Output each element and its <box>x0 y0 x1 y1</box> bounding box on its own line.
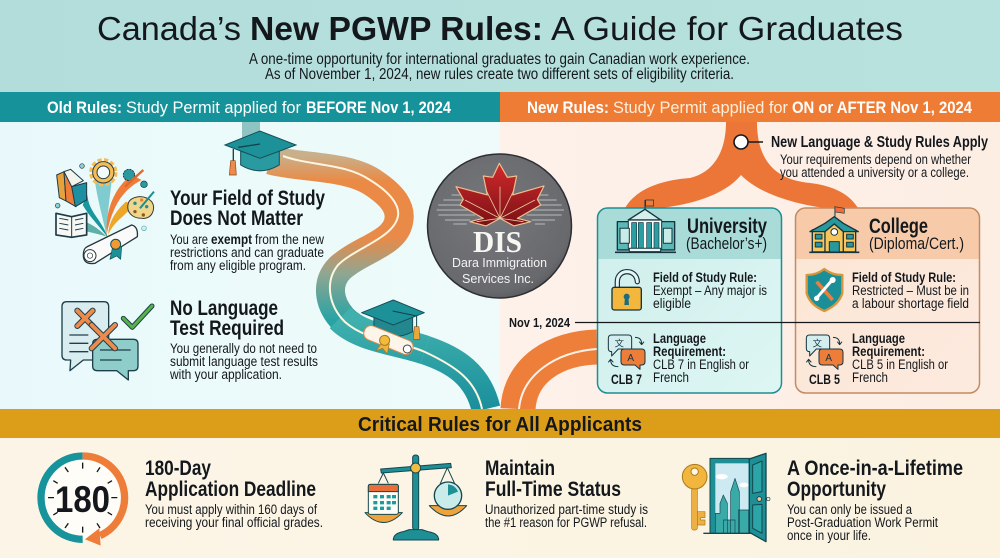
text block: full-time status: Full-Time Status <box>485 478 621 501</box>
icon: balance scale <box>365 455 467 540</box>
text block: once in a lifetime: once in your life. <box>787 528 871 543</box>
banner: new rules: New Rules: <box>527 98 609 117</box>
panel: university card <box>598 200 782 393</box>
panel: old rules <box>55 131 424 382</box>
panel: college card <box>796 207 980 393</box>
text block: once in a lifetime: A Once-in-a-Lifetime <box>787 457 963 480</box>
panel: university card: Field of Study Rule: <box>653 270 757 285</box>
icon: 180-day clock <box>41 456 125 546</box>
text block: field of study: exempt <box>211 232 252 247</box>
text block: field of study: from any eligible program. <box>170 258 306 273</box>
text block: field of study: You are <box>170 232 208 247</box>
panel: college card: Field of Study Rule: <box>852 270 956 285</box>
text block: full-time status <box>485 457 648 530</box>
icon: no language test <box>62 302 152 380</box>
panel: university card: eligible <box>653 296 691 311</box>
text block: no language test: submit language test results <box>170 354 318 369</box>
text block: no language test: You generally do not need to <box>170 341 317 356</box>
text block: deadline: You must apply within 160 days of <box>145 502 317 517</box>
title <box>97 10 903 47</box>
panel: university card: Requirement: <box>653 344 726 359</box>
logo: Dara Immigration Services: Dara Immigration <box>452 256 547 270</box>
icon: field of study burst <box>55 160 154 264</box>
text block: once in a lifetime: Opportunity <box>787 478 886 501</box>
logo: Dara Immigration Services <box>428 154 572 298</box>
banner: old rules: BEFORE Nov 1, 2024 <box>306 98 451 117</box>
callout: new language and study rules <box>734 134 988 180</box>
banner: old rules: Study Permit applied for <box>126 98 301 117</box>
icon: key and open door <box>682 453 770 542</box>
text block: once in a lifetime: You can only be issued a <box>787 502 912 517</box>
panel: university card: Language <box>653 331 706 346</box>
title: Canada’s <box>97 10 241 47</box>
panel: full-time status <box>365 455 648 540</box>
subtitle: A one-time opportunity for international graduates to gain Canadian work experience. <box>249 51 750 68</box>
icon: shield with tools <box>807 269 842 311</box>
banner: new rules: Study Permit applied for <box>613 98 788 117</box>
text block: no language test: No Language <box>170 297 278 320</box>
panel: 180-day deadline <box>41 456 323 546</box>
banner: critical rules: Critical Rules for All Applicants <box>358 414 642 436</box>
banner: new rules <box>500 92 1000 122</box>
text block: field of study: Your Field of Study <box>170 187 325 210</box>
title: A Guide for Graduates <box>551 10 903 47</box>
text block: field of study: Does Not Matter <box>170 207 303 230</box>
icon: translation bubbles: A <box>627 353 634 364</box>
banner: old rules <box>0 92 500 122</box>
panel: college card: Restricted – Must be in <box>852 283 969 298</box>
icon: graduation cap with diploma <box>362 300 424 357</box>
icon: university building <box>615 200 676 252</box>
text block: full-time status: Unauthorized part-time study is <box>485 502 648 517</box>
panel: once-in-a-lifetime <box>682 453 963 543</box>
icon: translation bubbles <box>608 335 645 369</box>
road: new rules fork <box>625 122 858 208</box>
text block: once in a lifetime: Post-Graduation Work Permit <box>787 515 938 530</box>
banner: new rules: ON or AFTER Nov 1, 2024 <box>792 98 972 117</box>
text block: deadline: receiving your final official grades. <box>145 515 323 530</box>
winding road: old rules path <box>251 122 486 409</box>
logo: Dara Immigration Services: DIS <box>473 224 522 259</box>
icon: graduation cap top <box>225 131 296 175</box>
text block: deadline <box>145 457 323 530</box>
icon: 180-day clock: 180 <box>55 479 110 520</box>
icon: translation bubbles: 文 <box>615 338 624 349</box>
panel: college card: (Diploma/Cert.) <box>869 234 964 253</box>
icon: translation bubbles college: A <box>825 353 832 364</box>
text block: no language test: with your application. <box>169 367 282 382</box>
title: New PGWP Rules: <box>250 10 543 47</box>
panel: college card: Language <box>852 331 905 346</box>
panel: university card: CLB 7 <box>611 372 642 387</box>
panel: university card: CLB 7 in English or <box>653 357 749 372</box>
text block: field of study: restrictions and can graduate <box>170 245 324 260</box>
icon: translation bubbles college: 文 <box>813 338 822 349</box>
subtitle <box>249 51 750 83</box>
text block: no language test: Test Required <box>170 317 284 340</box>
decorative logo lines and leaf <box>437 163 564 226</box>
panel: college card: Requirement: <box>852 344 925 359</box>
text block: deadline: 180-Day <box>145 457 211 480</box>
banner: critical rules <box>0 409 1000 438</box>
text block: full-time status: the #1 reason for PGWP refusal. <box>485 515 647 530</box>
text block: no language test <box>169 297 318 382</box>
panel: university card: French <box>653 370 689 385</box>
text block: full-time status: Maintain <box>485 457 555 480</box>
panel: college card: CLB 5 in English or <box>852 357 948 372</box>
panel: college card: French <box>852 370 888 385</box>
subtitle: As of November 1, 2024, new rules create two different sets of eligibility criteria. <box>265 66 734 83</box>
text block: field of study: from the new <box>255 232 324 247</box>
panel: college card: College <box>869 215 928 238</box>
logo: Dara Immigration Services: Services Inc. <box>462 272 534 286</box>
icon: open padlock <box>612 272 641 310</box>
icon: college building <box>809 207 859 252</box>
panel: college card: CLB 5 <box>809 372 840 387</box>
text block: field of study <box>170 187 325 273</box>
panel: university card: Exempt – Any major is <box>653 283 767 298</box>
banner: old rules: Old Rules: <box>47 98 122 117</box>
text block: deadline: Application Deadline <box>145 478 316 501</box>
timeline marker: Nov 1, 2024: Nov 1, 2024 <box>509 315 571 330</box>
panel: university card: (Bachelor’s+) <box>686 234 767 253</box>
panel: college card: a labour shortage field <box>852 296 969 311</box>
panel: university card: University <box>687 215 767 238</box>
icon: translation bubbles college <box>806 335 843 369</box>
road: new rules lower curve <box>518 347 597 409</box>
text block: once in a lifetime <box>787 457 963 543</box>
